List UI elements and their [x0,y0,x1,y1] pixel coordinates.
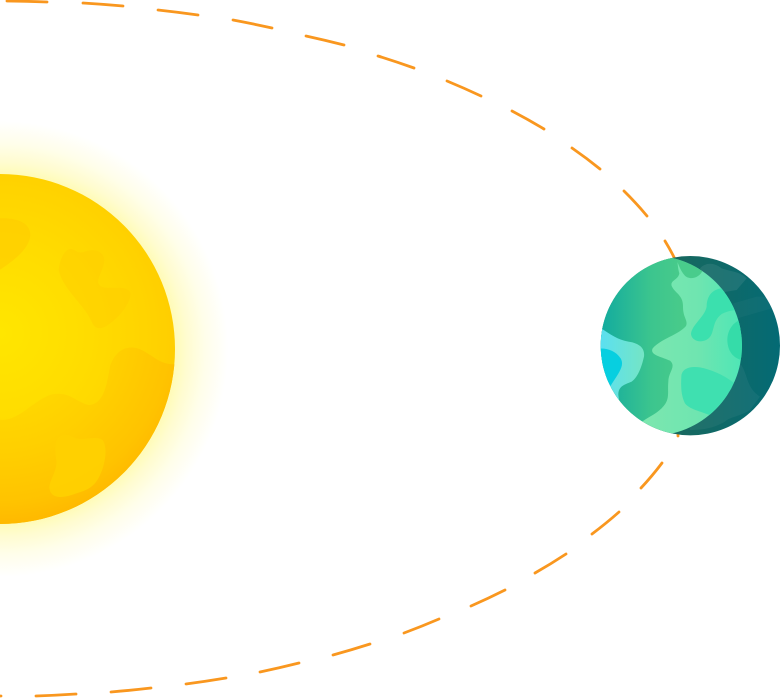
earth: pale land base [600,258,742,434]
sun: lower darker region [0,347,177,530]
earth: right edge patch [727,320,742,360]
sun: lower lighter spot [50,442,106,497]
sun: central spot [59,249,130,328]
earth: day side [600,258,742,434]
sun: upper left spot [0,224,30,270]
earth: upper right patch [691,288,735,342]
earth: top green patch [678,259,702,278]
sun [0,174,177,530]
earth: shallow water [600,329,644,400]
earth: night side right streak [733,297,780,320]
earth: left continent [600,258,686,422]
earth: lower right patch [681,367,734,415]
earth: deep water [600,348,622,386]
earth [600,256,780,436]
earth: night side upper patch [700,264,747,293]
earth: night side lower patch [690,363,760,430]
earth: night side [601,256,780,435]
sun glow [0,121,228,577]
